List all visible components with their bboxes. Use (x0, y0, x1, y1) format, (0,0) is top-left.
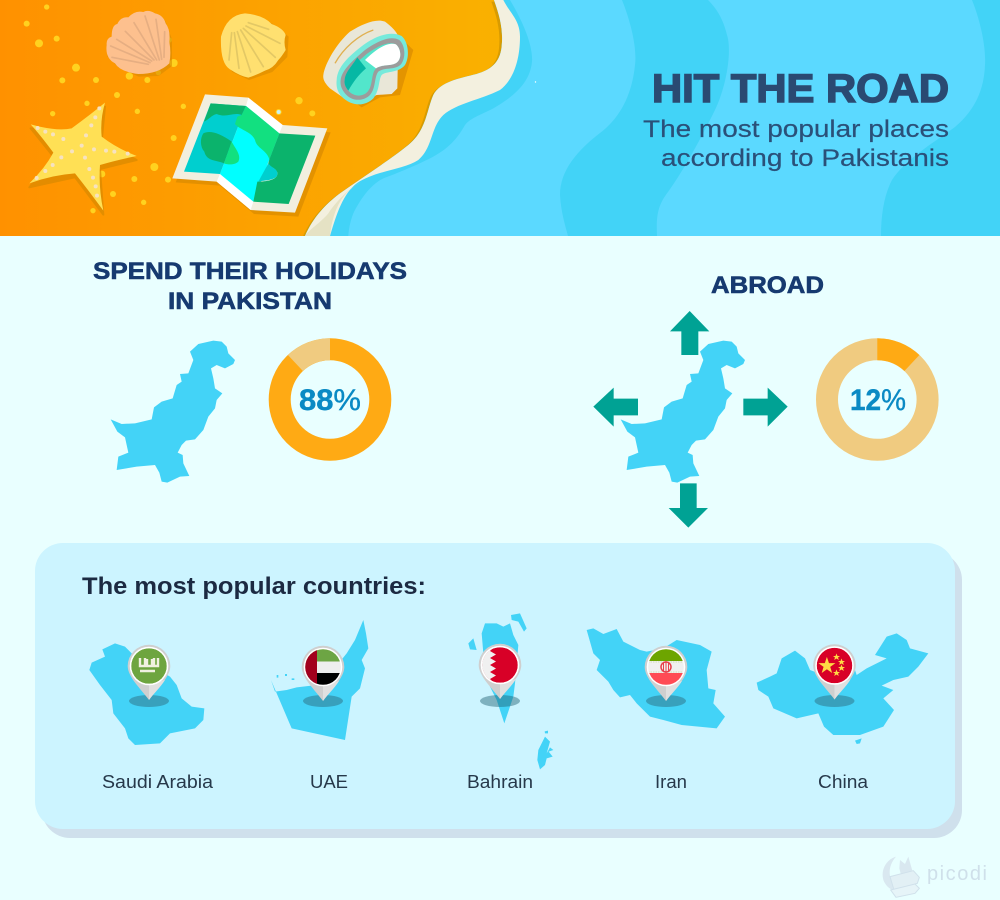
icon: peach seashell (106, 11, 172, 77)
icon: diving goggles (323, 21, 413, 107)
ocean water (305, 0, 1000, 236)
logo: picodi: picodi (927, 863, 987, 885)
label: Saudi Arabia (102, 772, 214, 792)
map: Pakistan with arrows (593, 311, 788, 528)
map: Pakistan (111, 341, 235, 483)
panel heading: The most popular countries: (82, 573, 426, 600)
sand speckles (24, 4, 315, 213)
donut chart: 88 percent: 88% (299, 384, 361, 417)
logo: picodi (883, 857, 987, 897)
label: UAE (310, 772, 348, 792)
header beach illustration (0, 0, 1000, 238)
subtitle: The most popular places (643, 116, 949, 143)
shoreline foam (305, 0, 520, 236)
panel: most popular countries (35, 543, 962, 838)
heading: spend holidays in Pakistan: SPEND THEIR HOLIDAYS (93, 258, 407, 285)
label: Bahrain (467, 772, 533, 792)
country: UAE (271, 620, 368, 792)
country: Iran (587, 628, 725, 792)
donut chart: 12 percent: 12% (850, 384, 906, 417)
country: China (757, 633, 928, 792)
donut chart: 88 percent (280, 338, 380, 450)
label: Iran (655, 772, 687, 792)
donut chart: 12 percent (827, 338, 928, 450)
subtitle: according to Pakistanis (661, 145, 949, 172)
heading: abroad: ABROAD (711, 272, 824, 299)
icon: folded map (172, 94, 331, 217)
title: HIT THE ROAD (652, 67, 949, 111)
country: Saudi Arabia (89, 643, 214, 792)
subtitle (643, 116, 949, 172)
icon: yellow seashell (221, 13, 289, 80)
arrows pointing outward (593, 311, 788, 528)
country: Bahrain (467, 613, 553, 792)
shoreline shadow on sand (302, 2, 517, 238)
label: China (818, 772, 869, 792)
heading: spend holidays in Pakistan (93, 258, 407, 315)
icon: starfish (29, 103, 137, 215)
heading: spend holidays in Pakistan: IN PAKISTAN (168, 288, 332, 315)
